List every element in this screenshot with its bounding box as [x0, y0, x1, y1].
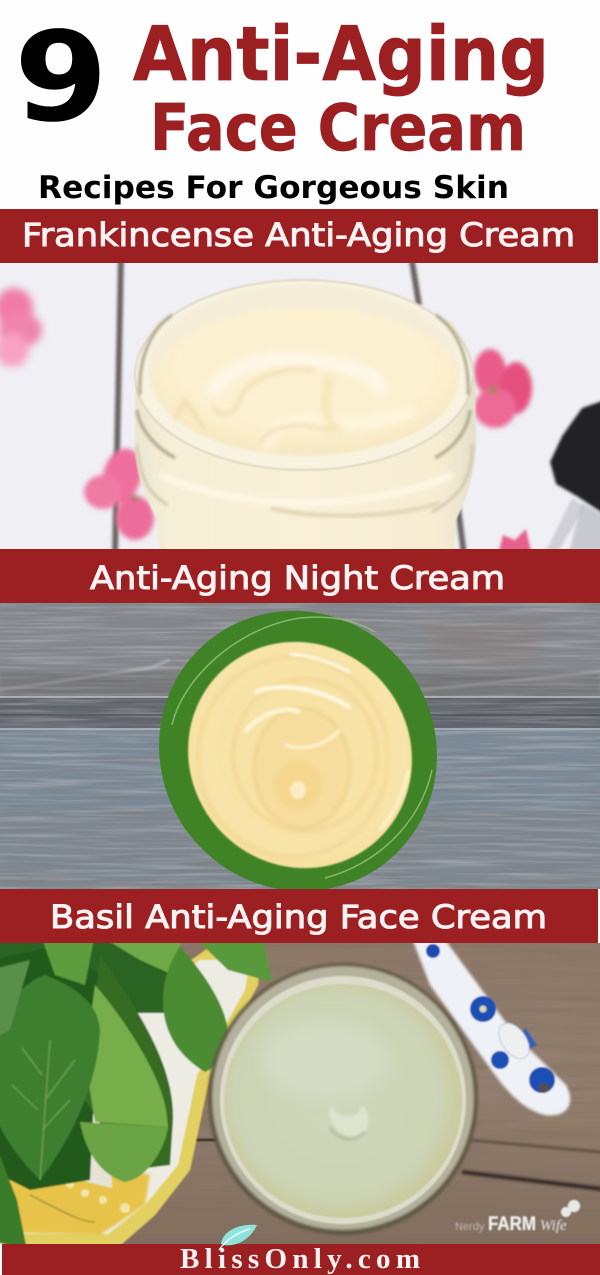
banner: BlissOnly.com: BlissOnly.com — [180, 1243, 420, 1275]
jar rim — [135, 280, 473, 470]
bowl — [159, 610, 437, 889]
number nine: 9 — [14, 6, 108, 150]
watermark: Nerdy Farm Wife: Wife — [540, 1218, 567, 1234]
glass jar body — [135, 320, 476, 560]
banner: Basil Anti-Aging Face Cream — [0, 889, 598, 943]
yellow plate — [0, 933, 262, 1250]
icon: pink flower middle — [84, 444, 154, 540]
basil leaves — [0, 933, 272, 1250]
photo: frankincense cream jar on white wood — [0, 253, 600, 560]
wood plank gaps — [470, 1140, 600, 1153]
photo: night cream in green bowl on grey wood — [0, 603, 600, 889]
subtitle: Recipes For Gorgeous Skin — [38, 170, 509, 206]
icon: pink flower left — [0, 288, 42, 367]
banner: Anti-Aging Night Cream: Anti-Aging Night Cream — [90, 559, 505, 597]
watermark: Nerdy Farm Wife — [455, 1200, 580, 1235]
cream — [224, 984, 462, 1218]
banner: Anti-Aging Night Cream — [0, 549, 600, 603]
icon: teal leaf logo — [219, 1225, 257, 1250]
photo: basil cream jar with leaves on rustic wood — [0, 933, 600, 1254]
cream swirl — [154, 307, 458, 455]
banner: BlissOnly.com — [2, 1243, 600, 1275]
banner: Basil Anti-Aging Face Cream: Basil Anti-Aging Face Cream — [50, 898, 547, 936]
plank gaps — [115, 255, 464, 555]
glass jar — [208, 963, 478, 1235]
title — [133, 10, 549, 166]
spoon — [410, 933, 570, 1115]
icon: pink flower bottom — [498, 528, 533, 549]
icon: pink flower right — [474, 349, 532, 428]
watermark: Nerdy Farm Wife: Nerdy — [455, 1221, 485, 1233]
watermark: Nerdy Farm Wife: FARM — [488, 1214, 536, 1235]
banner: Frankincense Anti-Aging Cream: Frankincense Anti-Aging Cream — [22, 216, 575, 254]
banner: Frankincense Anti-Aging Cream — [0, 209, 598, 263]
title: Anti-Aging — [133, 10, 549, 98]
title: Face Cream — [150, 92, 526, 166]
cream swirl — [187, 640, 413, 870]
icon: black dropper — [544, 398, 600, 555]
